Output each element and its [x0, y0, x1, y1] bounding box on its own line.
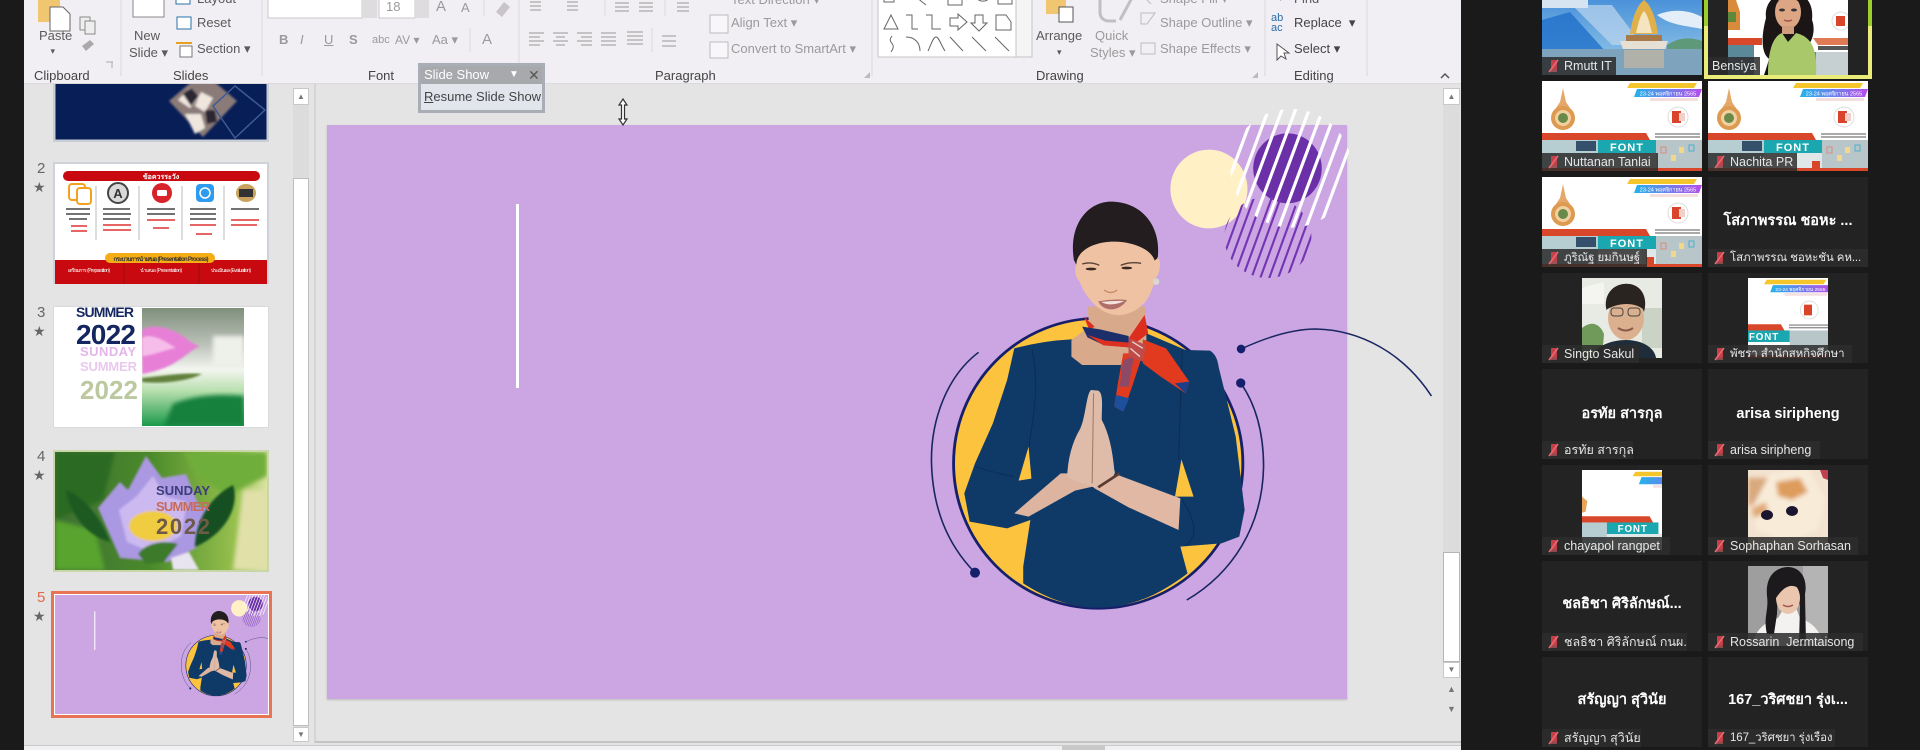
yellow ring circle: [954, 318, 1243, 608]
clipboard group labels: [34, 28, 90, 83]
portrait photo: [1748, 566, 1828, 646]
editing group labels: Select ▾: [1294, 41, 1340, 56]
tile: Warisachaya: [1708, 657, 1868, 747]
slide: FONT event cover: [1542, 81, 1702, 171]
thumbnail 2: presentation cautions slide: [53, 162, 269, 284]
mouse cursor: [618, 98, 628, 126]
center name: ชลธิชา ศิริลักษณ์...: [1562, 596, 1682, 612]
slide: FONT event cover: 23-24 พฤศจิกายน 2565: [1806, 90, 1862, 98]
name label: 167_วริศชยา รุ่งเรือง: [1730, 732, 1832, 744]
tile: Bensiya video: [1728, 0, 1848, 75]
font group labels: S: [349, 32, 358, 47]
thumbnail 1: navy slide: [53, 84, 269, 142]
name label: ภูริณัฐ ยมกินษฐ์: [1564, 252, 1640, 264]
tile: Nachita PR: [1708, 81, 1868, 171]
editing group labels: Editing: [1294, 68, 1334, 83]
name label: อรทัย สารกุล: [1564, 443, 1633, 457]
name label: [1542, 537, 1670, 555]
font group labels: B: [279, 32, 288, 47]
selfie video: [1582, 278, 1662, 358]
font group labels: Font: [368, 68, 394, 83]
center name: โสภาพรรณ ชอหะ ...: [1724, 213, 1852, 229]
slide number 3: [33, 304, 46, 339]
font group labels: A: [482, 31, 492, 48]
slide: FONT event cover: FONT: [1610, 238, 1644, 250]
name label: Rossarin Jermtaisong: [1730, 635, 1854, 649]
woman: jacket: [964, 333, 1245, 608]
cream circle: [1170, 150, 1247, 228]
name label: [1542, 249, 1647, 267]
slide art: woman and circles: [931, 77, 1431, 608]
slide show floating toolbar: [418, 63, 545, 113]
woman: face: [1075, 242, 1160, 315]
toolbar title: Slide Show: [424, 67, 489, 82]
name label: Sophaphan Sorhasan: [1730, 539, 1851, 553]
font group labels: [279, 0, 492, 83]
toolbar title: ✕: [528, 67, 540, 83]
paragraph group labels: [655, 0, 856, 83]
slide: FONT event cover: FONT: [1776, 142, 1810, 154]
tile: chayapol rangpet: [1542, 465, 1702, 555]
tile: Sopapan: [1708, 177, 1868, 267]
editor vertical scrollbar: ▲: [1448, 92, 1455, 101]
center name: อรทัย สารกุล: [1581, 406, 1663, 422]
name label: [1708, 345, 1852, 363]
slide: FONT event cover: 23-24 พฤศจิกายน 2565: [1640, 90, 1696, 98]
editor vertical scrollbar: [1443, 88, 1460, 713]
drawing group labels: Shape Outline ▾: [1160, 15, 1253, 30]
slides group labels: Section ▾: [197, 41, 250, 56]
tile: Chonticha: [1542, 561, 1702, 651]
slide number 5: 5: [37, 589, 45, 606]
thumbnail 4: purple water lily slide: SUMMER: [156, 499, 211, 514]
woman: scarf: [1084, 315, 1148, 342]
drawing group labels: Arrange: [1036, 28, 1082, 43]
slides group labels: [129, 0, 250, 83]
ribbon icons: [38, 0, 1450, 78]
active speaker frame: [1704, 0, 1872, 79]
name label: ชลธิชา ศิริลักษณ์ กนผ.: [1564, 635, 1687, 649]
editor vertical scrollbar: ▲: [1447, 684, 1456, 694]
font group labels: I: [300, 32, 304, 47]
woman: praying hands: [1067, 390, 1115, 488]
font group labels: Aa ▾: [432, 32, 458, 47]
white stripe circle: [1196, 77, 1376, 230]
cat photo: [1748, 470, 1828, 550]
center name: 167_วริศชยา รุ่งเ...: [1728, 692, 1848, 708]
thumbnail 3: summer 2022 lotus slide: 2022: [80, 375, 138, 405]
name label: [1542, 153, 1658, 171]
tile: Saranya: [1542, 657, 1702, 747]
yellow gaps beside arms: [1019, 447, 1194, 497]
name label: โสภาพรรณ ชอหะชัน คห...: [1730, 252, 1861, 264]
tile: Sophaphan Sorhasan: [1708, 465, 1868, 555]
name label: Nachita PR: [1730, 155, 1793, 169]
paragraph group labels: Convert to SmartArt ▾: [731, 41, 856, 56]
slides group labels: Slides: [173, 68, 208, 83]
slides group labels: Reset: [197, 15, 231, 30]
slide artwork overlay: [930, 109, 1432, 610]
font group labels: U: [324, 32, 333, 47]
thumbnail 2: presentation cautions slide: ข้อควรระวัง: [143, 172, 180, 181]
name label: Singto Sakul: [1564, 347, 1634, 361]
status bar: [24, 745, 1461, 750]
paragraph group labels: Paragraph: [655, 68, 716, 83]
name label: [1542, 57, 1616, 75]
slide number 5: [33, 589, 46, 624]
editor vertical scrollbar: ▼: [1448, 665, 1455, 674]
slide: FONT event cover: [1542, 177, 1702, 267]
thumbnail 5: current slide selected: [51, 591, 272, 718]
paragraph group labels: Align Text ▾: [731, 15, 797, 30]
name label: [1542, 729, 1641, 747]
thumbnail 5 miniature: [55, 595, 268, 714]
slide: FONT event cover cropped: FONT: [1618, 524, 1648, 535]
thumbnail 2: presentation cautions slide: กระบวนการนำเสนอ (Presentation Process): [114, 255, 208, 263]
tile: arisa siripheng: [1708, 369, 1868, 459]
thumbnail 3: summer 2022 lotus slide: 2022: [76, 319, 136, 350]
slide number 2: [33, 160, 46, 195]
slide: FONT event cover: [1708, 81, 1868, 171]
slide editor pane frame: [314, 84, 1461, 743]
tile: Phurinat: [1542, 177, 1702, 267]
thumbnail 2: presentation cautions slide: นำเสนอ (Presentation): [140, 268, 183, 274]
drawing group labels: Drawing: [1036, 68, 1084, 83]
thumbnail 3: summer 2022 lotus slide: SUNDAY: [80, 344, 136, 359]
tile: Singto Sakul: [1542, 273, 1702, 363]
tile: Nuttanan Tanlai: [1542, 81, 1702, 171]
font group labels: AV ▾: [395, 33, 419, 47]
slide: FONT event cover cropped: FONT: [1749, 332, 1779, 343]
thumbnail 2: presentation cautions slide: ประเมินผล (Evaluation): [211, 267, 251, 274]
center name: สรัญญา สุวินัย: [1578, 692, 1666, 708]
font group labels: A: [461, 0, 470, 15]
name label: [1542, 345, 1639, 363]
thumbnail 2: presentation cautions slide: A: [113, 186, 123, 201]
editing group labels: ac: [1271, 22, 1283, 34]
editing group labels: Replace ▾: [1294, 15, 1355, 30]
decorative arcs with dots: [931, 329, 1431, 600]
panel divider handle: [1483, 353, 1488, 379]
clipboard group labels: Paste: [39, 28, 72, 43]
woman: neck: [1071, 307, 1146, 365]
name label: Rmutt IT: [1564, 59, 1612, 73]
dark purple circle: [1253, 133, 1322, 203]
drawing group labels: Shape Effects ▾: [1160, 41, 1251, 56]
thumbnail 4: purple water lily slide: 2022: [156, 514, 210, 539]
white vertical rule on slide: [516, 204, 519, 388]
name label: Bensiya: [1712, 59, 1756, 73]
drawing group labels: Styles ▾: [1090, 45, 1136, 60]
panel: participant gallery: [1461, 0, 1920, 750]
tile: Patchara: [1708, 273, 1868, 363]
slide number 4: 4: [37, 448, 45, 465]
slide: FONT event cover: 23-24 พฤศจิกายน 2565: [1640, 186, 1696, 194]
slide: FONT event cover cropped: 23-24 พฤศจิกายน 2565: [1775, 287, 1826, 293]
speaker border tint: [1704, 0, 1872, 26]
slide number 4: ★: [33, 467, 46, 483]
toolbar title: [421, 66, 542, 84]
purple stripe circle: [1204, 140, 1355, 287]
name label: chayapol rangpet: [1564, 539, 1660, 553]
slide number 3: ★: [33, 323, 46, 339]
thumbnail 4: purple water lily slide: [53, 450, 269, 572]
woman: forearms: [1014, 473, 1093, 517]
slide number 3: 3: [37, 304, 45, 321]
name label: [1708, 633, 1863, 651]
editor vertical scrollbar: ▼: [1447, 704, 1456, 714]
tile: Rmutt IT: [1542, 0, 1702, 75]
name label: [1708, 441, 1820, 459]
drawing group labels: [1036, 0, 1253, 83]
slide thumbnail scrollbar: ▲: [297, 92, 305, 101]
slide number 2: 2: [37, 160, 45, 177]
panel: PowerPoint window: [24, 0, 1461, 750]
name label: พัชรา สำนักสหกิจศึกษา: [1730, 348, 1845, 360]
woman: hair: [1073, 202, 1158, 273]
thumbnail 3: summer 2022 lotus slide: [53, 306, 269, 428]
font group labels: abc: [372, 34, 390, 46]
name label: arisa siripheng: [1730, 443, 1811, 457]
name label: [1542, 441, 1633, 459]
name label: [1542, 633, 1687, 651]
name label: [1708, 249, 1868, 267]
drawing group labels: Quick: [1095, 28, 1128, 43]
editing group labels: ab: [1271, 12, 1283, 24]
resume command: Resume Slide Show: [424, 89, 541, 104]
slide thumbnail scrollbar: ▼: [297, 730, 305, 739]
slides group labels: Slide ▾: [129, 45, 168, 60]
slide: FONT event cover cropped: [1582, 470, 1662, 550]
slide number 4: [33, 448, 46, 483]
clipboard group labels: ▾: [50, 46, 55, 56]
name label: [1708, 153, 1797, 171]
slide thumbnail scrollbar: [293, 88, 309, 742]
tile: Orathai: [1542, 369, 1702, 459]
editing group labels: [1271, 0, 1356, 83]
center name: arisa siripheng: [1736, 406, 1840, 422]
name label: [1708, 729, 1835, 747]
name label: Nuttanan Tanlai: [1564, 155, 1651, 169]
toolbar title: ▼: [509, 69, 519, 80]
thumbnail 2: presentation cautions slide: เตรียมการ (Preparation): [68, 267, 110, 274]
main slide background: [327, 125, 1347, 699]
slide: FONT event cover cropped: [1748, 278, 1828, 358]
name label: [1708, 537, 1858, 555]
slides group labels: New: [134, 28, 160, 43]
slide number 5: ★: [33, 608, 46, 624]
slide number 2: ★: [33, 179, 46, 195]
thumbnail 3: summer 2022 lotus slide: SUMMER: [80, 359, 138, 374]
slide: FONT event cover: FONT: [1610, 142, 1644, 154]
ribbon toolbar: [24, 0, 1461, 84]
name label: สรัญญา สุวินัย: [1564, 731, 1641, 745]
drawing group labels: ▾: [1057, 47, 1062, 57]
tile: Rossarin Jermtaisong: [1708, 561, 1868, 651]
clipboard group labels: Clipboard: [34, 68, 90, 83]
thumbnail 4: purple water lily slide: SUNDAY: [156, 483, 210, 498]
name label: [1708, 57, 1760, 75]
